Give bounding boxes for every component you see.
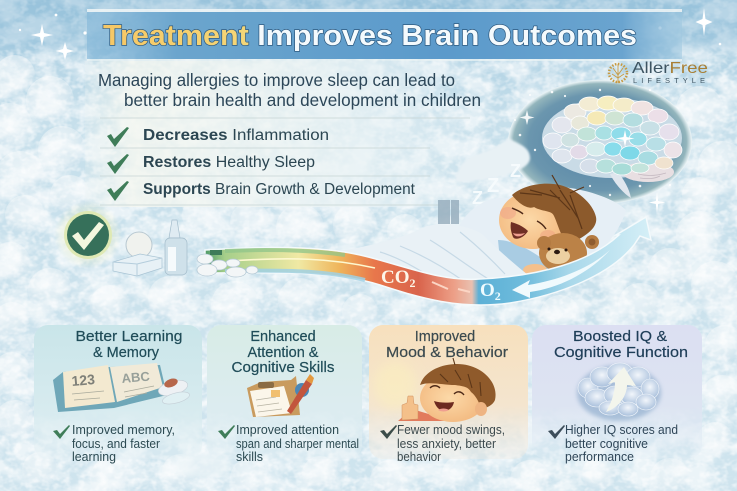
heading: Enhanced	[250, 329, 316, 345]
icon: tissue box	[113, 254, 162, 276]
subtitle text	[98, 70, 481, 110]
sparkles	[19, 8, 721, 60]
panel: improved mood and behavior	[369, 325, 528, 464]
heading: Boosted IQ &	[573, 329, 667, 345]
panel: enhanced attention and cognitive skills	[207, 325, 362, 464]
benefit: decreases inflammation: Decreases Inflammation	[143, 127, 329, 144]
check	[548, 425, 565, 439]
check	[380, 425, 397, 439]
logo: AllerFree Lifestyle	[609, 60, 708, 85]
hand	[523, 264, 547, 276]
title banner	[87, 9, 682, 61]
nightstand	[438, 200, 459, 224]
body text: span and sharper mental	[236, 437, 359, 451]
body text: Improved memory,	[72, 423, 175, 437]
icon: zzz: Z	[487, 175, 499, 197]
O2 label: 2	[495, 289, 501, 303]
CO2 label: 2	[410, 276, 416, 290]
body text	[397, 423, 505, 464]
foreground cloud	[176, 454, 232, 478]
hair	[512, 184, 596, 244]
O2 label: O	[480, 280, 495, 301]
heading: Attention &	[248, 345, 319, 361]
body text: Higher IQ scores and	[565, 423, 678, 437]
logo: AllerFree Lifestyle: Aller Free	[632, 60, 708, 77]
icon: open book: ABC	[121, 369, 151, 386]
brain bubble	[455, 80, 692, 213]
face	[499, 191, 567, 249]
icon: brain	[542, 96, 682, 198]
icon: happy child	[398, 358, 496, 422]
benefit: supports brain growth: Supports Brain Growth & Development	[143, 181, 416, 198]
heading: Better Learning	[76, 329, 182, 345]
check	[218, 425, 235, 439]
icon: check badge	[54, 201, 122, 269]
body text: better cognitive	[565, 437, 648, 451]
eyes	[512, 208, 546, 229]
icon: zzz: Z	[510, 161, 521, 181]
benefit list	[100, 118, 470, 205]
icon: zzz	[472, 161, 521, 208]
sleeping child	[335, 175, 626, 290]
icon: nasal spray bottle	[165, 220, 187, 275]
heading	[386, 329, 508, 361]
icon: zzz: Z	[472, 188, 483, 208]
icon: tissue	[126, 232, 152, 258]
heading: Improved	[415, 329, 475, 345]
heading: Mood & Behavior	[386, 345, 508, 361]
body text: Fewer mood swings,	[397, 423, 505, 437]
teddy bear	[537, 233, 599, 273]
CO2 label: CO	[381, 267, 410, 288]
icon: pills	[157, 377, 191, 406]
icon: pills	[197, 250, 258, 277]
heading: Cognitive Function	[554, 345, 688, 361]
body text: skills	[236, 450, 263, 464]
heading: & Memory	[93, 345, 160, 361]
heading: Cognitive Skills	[232, 360, 334, 376]
heading	[232, 329, 334, 376]
body text: less anxiety, better	[397, 437, 496, 451]
pillow	[458, 186, 626, 268]
panel: better learning and memory	[34, 325, 202, 464]
benefit: decreases inflammation	[107, 127, 329, 147]
body text	[236, 423, 359, 464]
subtitle text: Managing allergies to improve sleep can lead to	[98, 70, 455, 90]
intro panel wash	[85, 61, 485, 207]
subtitle text: better brain health and development in children	[124, 90, 481, 110]
logo: AllerFree Lifestyle: LIFESTYLE	[633, 76, 705, 85]
benefit: restores healthy sleep	[107, 154, 315, 174]
check	[53, 425, 70, 439]
shoulder	[498, 240, 560, 280]
panel: boosted iq and cognitive function	[532, 325, 702, 464]
icon: open book	[53, 363, 167, 412]
body text	[72, 423, 175, 464]
blanket	[335, 224, 532, 290]
treatment items	[54, 201, 258, 277]
body text: focus, and faster	[72, 437, 160, 451]
heading	[554, 329, 688, 361]
title text: Treatment Improves Brain Outcomes	[103, 20, 637, 52]
body text: learning	[72, 450, 116, 464]
icon: open book: 123	[71, 371, 96, 389]
heading	[76, 329, 182, 361]
mouth	[511, 222, 528, 239]
icon: clipboard and pencil	[247, 374, 314, 417]
benefit: restores healthy sleep: Restores Healthy Sleep	[143, 154, 315, 171]
body text: performance	[565, 450, 634, 464]
icon: brain with arrow	[577, 363, 661, 421]
body text: Improved attention	[236, 423, 339, 437]
body text: behavior	[397, 450, 441, 464]
body text	[565, 423, 678, 464]
airflow ribbon arrow	[205, 217, 651, 305]
